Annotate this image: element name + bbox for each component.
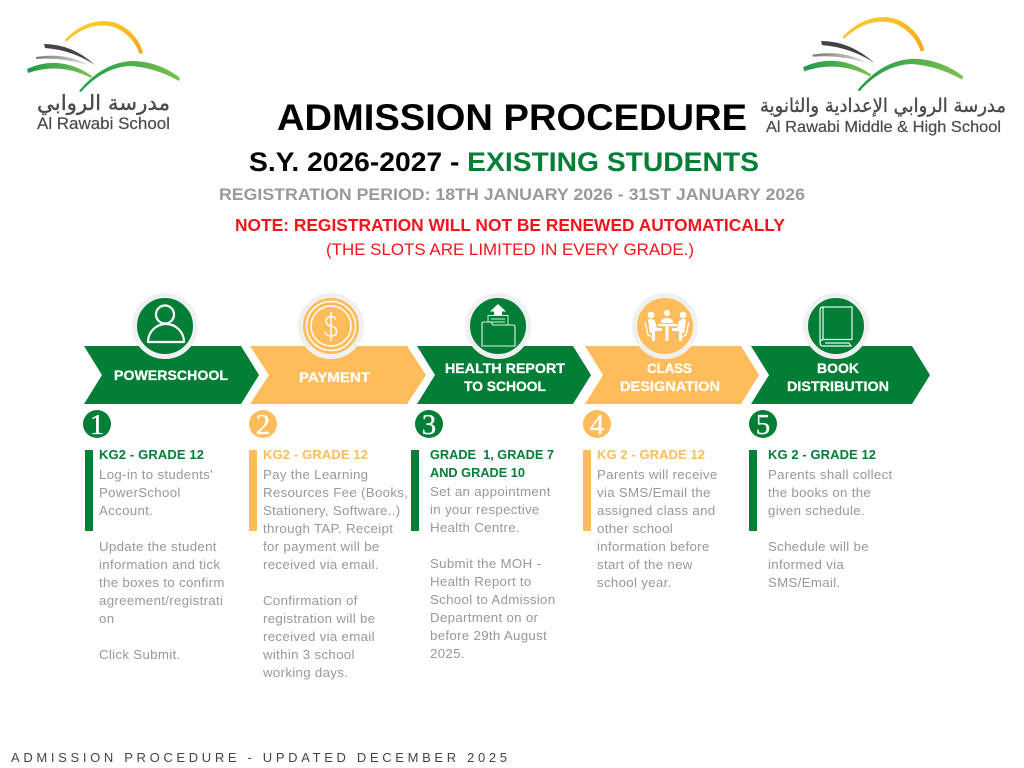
column 2 text: Pay the Learning <box>263 467 368 482</box>
column 2 text: within 3 school <box>262 647 355 662</box>
icon: meeting table <box>634 296 696 356</box>
badge 1 <box>83 409 111 441</box>
step 2 chevron: Payment <box>250 346 426 404</box>
column 5 text: KG 2 - GRADE 12 <box>768 447 876 462</box>
title: ADMISSION PROCEDURE <box>277 96 747 138</box>
logo: Al Rawabi Middle & High School: مدرسة الروابي الإعدادية والثانوية <box>760 95 1006 117</box>
logo: Al Rawabi Middle & High School <box>760 17 1006 136</box>
column 5 text: SMS/Email. <box>768 575 840 590</box>
column 2 text: registration will be <box>263 611 375 626</box>
badge 5: 5 <box>756 409 770 441</box>
badge 2: 2 <box>256 409 270 441</box>
column 2 text: working days. <box>262 665 348 680</box>
note: limited slots: (THE SLOTS ARE LIMITED IN EVERY GRADE.) <box>326 240 694 259</box>
subtitle: school year: S.Y. 2026-2027 - EXISTING STUDENTS <box>249 147 759 177</box>
column 3 text: Health Report to <box>430 574 532 589</box>
column 3 text <box>411 447 555 661</box>
column 1 text: the boxes to confirm <box>99 575 225 590</box>
badge 4 <box>583 409 611 441</box>
column 1 text: Log-in to students' <box>99 467 213 482</box>
badge 1: 1 <box>90 409 104 441</box>
column 4 text: start of the new <box>597 557 693 572</box>
column 2 text <box>249 447 408 680</box>
step 3 chevron: Health report <box>417 346 591 404</box>
column 2 text: Resources Fee (Books, <box>263 485 408 500</box>
footer: ADMISSION PROCEDURE - UPDATED DECEMBER 2025 <box>11 750 507 765</box>
column 2 text: Confirmation of <box>263 593 358 608</box>
step 3 chevron: Health report: TO SCHOOL <box>464 379 546 394</box>
column 4 text <box>583 447 718 590</box>
column 2 text: received via email. <box>263 557 379 572</box>
column 2 text: for payment will be <box>263 539 380 554</box>
icon: person <box>134 296 196 356</box>
step 5 chevron: Book distribution: BOOK <box>817 361 859 376</box>
column 1 text: on <box>99 611 114 626</box>
step 4 chevron: Class designation: CLASS <box>647 361 692 376</box>
column 5 text: Schedule will be <box>768 539 869 554</box>
column 2 text: received via email <box>263 629 375 644</box>
step 4 chevron: Class designation <box>585 346 759 404</box>
column 1 text: Update the student <box>99 539 217 554</box>
column 5 text <box>749 447 893 590</box>
column 1 text: information and tick <box>99 557 220 572</box>
column 3 text: 2025. <box>430 646 465 661</box>
column 3 text: in your respective <box>430 502 540 517</box>
logo: Al Rawabi School: Al Rawabi School <box>37 115 170 133</box>
step 4 chevron: Class designation: DESIGNATION <box>620 379 720 394</box>
step 3 chevron: Health report: HEALTH REPORT <box>445 361 566 376</box>
badge 3 <box>415 409 443 441</box>
badge 4: 4 <box>590 409 605 441</box>
registration period: REGISTRATION PERIOD: 18TH JANUARY 2026 - 31ST JANUARY 2026 <box>219 185 805 204</box>
column 1 text: agreement/registrati <box>99 593 223 608</box>
step 2 chevron: Payment: PAYMENT <box>299 370 371 385</box>
column 3 text: GRADE 1, GRADE 7 <box>430 447 554 462</box>
badge 2 <box>249 409 277 441</box>
column 4 text: KG 2 - GRADE 12 <box>597 447 705 462</box>
column 4 text: assigned class and <box>597 503 716 518</box>
column 3 text: Health Centre. <box>430 520 520 535</box>
logo: Al Rawabi School <box>27 21 180 133</box>
column 5 text: Parents shall collect <box>768 467 893 482</box>
logo: Al Rawabi Middle & High School: Al Rawabi Middle & High School <box>766 119 1001 136</box>
column 1 text: Account. <box>99 503 153 518</box>
column 3 text: Submit the MOH - <box>430 556 541 571</box>
step 5 chevron: Book distribution <box>751 346 930 404</box>
step 5 chevron: Book distribution: DISTRIBUTION <box>787 379 889 394</box>
column 1 text: KG2 - GRADE 12 <box>99 447 204 462</box>
badge 5 <box>749 409 777 441</box>
column 4 text: information before <box>597 539 710 554</box>
badge 3: 3 <box>422 409 436 441</box>
column 2 text: through TAP. Receipt <box>263 521 393 536</box>
column 2 text: Stationery, Software..) <box>263 503 400 518</box>
column 2 text: KG2 - GRADE 12 <box>263 447 368 462</box>
column 4 text: Parents will receive <box>597 467 718 482</box>
column 3 text: Department on or <box>430 610 539 625</box>
icon: book <box>806 296 866 356</box>
column 1 text: PowerSchool <box>99 485 181 500</box>
column 3 text: before 29th August <box>430 628 547 643</box>
column 3 text: School to Admission <box>430 592 555 607</box>
column 3 text: AND GRADE 10 <box>430 465 525 480</box>
column 5 text: the books on the <box>768 485 871 500</box>
icon: folder with upload arrow <box>468 296 528 356</box>
column 4 text: school year. <box>597 575 672 590</box>
column 4 text: other school <box>597 521 673 536</box>
column 1 text <box>85 447 225 662</box>
icon: coin <box>300 296 362 356</box>
column 3 text: Set an appointment <box>430 484 551 499</box>
column 1 text: Click Submit. <box>99 647 180 662</box>
step 1 chevron: PowerSchool <box>84 346 259 404</box>
column 5 text: given schedule. <box>768 503 865 518</box>
step 1 chevron: PowerSchool: POWERSCHOOL <box>114 368 228 383</box>
logo: Al Rawabi School: مدرسة الروابي <box>37 91 170 115</box>
note: NOTE: REGISTRATION WILL NOT BE RENEWED AUTOMATICALLY <box>235 215 785 235</box>
column 4 text: via SMS/Email the <box>597 485 711 500</box>
column 5 text: informed via <box>768 557 844 572</box>
